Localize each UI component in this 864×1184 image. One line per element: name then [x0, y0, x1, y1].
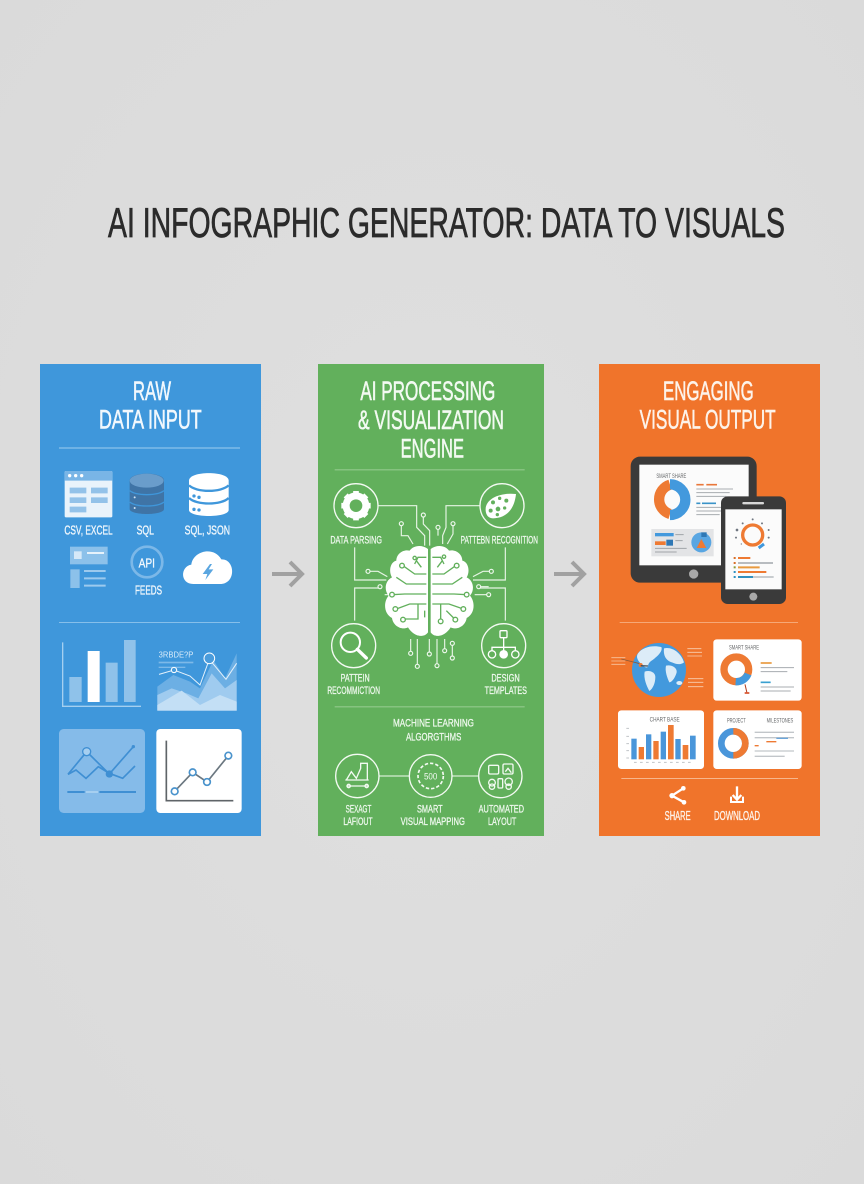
tablet: SMART SHARE — [656, 473, 687, 480]
icon: smart layout — [336, 754, 379, 798]
panel: engaging visual output — [599, 364, 820, 836]
area chart: 3RBDE?P — [159, 649, 194, 659]
heading: raw data input: RAW — [133, 376, 172, 406]
machine learning heading: MACHINE LEARNING — [393, 718, 474, 730]
engine labels — [327, 534, 538, 697]
engine labels: TEMPLATES — [485, 685, 527, 697]
arrow: processing to output — [554, 562, 584, 586]
device mockups — [631, 457, 786, 604]
pipeline labels: SMART — [417, 804, 443, 816]
icon: cloud — [183, 551, 232, 584]
bar chart — [63, 640, 141, 706]
tablet — [631, 457, 757, 583]
pipeline labels — [343, 804, 524, 828]
bar chart card: CHART BASE — [650, 717, 680, 724]
icon: api ring — [132, 547, 162, 577]
icon: api ring: API — [139, 556, 155, 570]
area chart — [157, 649, 237, 711]
icon: design template tree — [482, 624, 526, 668]
share and download labels: SHARE — [665, 808, 691, 823]
machine learning section — [335, 706, 525, 828]
icon labels: SQL, JSON — [185, 522, 230, 537]
pipeline labels: LAFIOUT — [343, 816, 373, 828]
icon labels: CSV, EXCEL — [64, 522, 113, 537]
icon: circuit brain — [385, 546, 474, 636]
heading: engaging visual output: VISUAL OUTPUT — [640, 404, 776, 434]
heading: raw data input — [59, 376, 240, 449]
icon: visual mapping — [409, 755, 452, 797]
icon labels: FEEDS — [135, 583, 162, 598]
pipeline labels: LAYOUT — [488, 816, 517, 828]
pipeline labels: VISUAL MAPPING — [401, 816, 465, 828]
icon: visual mapping: 500 — [424, 771, 437, 781]
tablet donut chart — [659, 484, 685, 515]
donut card: SMART SHARE — [729, 644, 759, 651]
engine labels: RECOMMICTION — [327, 685, 380, 697]
pipeline labels: SEXAGT — [346, 804, 371, 816]
globe with callouts — [611, 643, 703, 697]
output cards — [611, 639, 802, 823]
connector lines — [355, 506, 505, 666]
heading: raw data input: DATA INPUT — [99, 404, 202, 434]
pipeline labels: AUTOMATED — [479, 804, 524, 816]
icon: spreadsheet — [65, 471, 112, 517]
heading: ai processing engine: & VISUALIZATION — [358, 405, 504, 435]
project milestones card: PROJECT — [727, 718, 746, 725]
phone — [721, 496, 786, 604]
icon: json database — [189, 473, 229, 516]
icon: magnifier — [332, 624, 376, 668]
heading: ai processing engine — [335, 376, 525, 470]
heading: ai processing engine: ENGINE — [401, 433, 464, 463]
project milestones card — [713, 710, 802, 769]
engine diagram — [327, 484, 538, 697]
icon: share — [669, 786, 686, 805]
project milestones card: MILESTONES — [767, 718, 794, 725]
icon: pattern leaf — [480, 484, 524, 528]
heading: engaging visual output: ENGAGING — [663, 376, 754, 406]
icon: download — [731, 786, 743, 802]
arrow: input to processing — [272, 562, 302, 586]
share and download labels: DOWNLOAD — [714, 808, 760, 823]
machine learning heading: ALGORGTHMS — [406, 732, 462, 744]
light line chart card — [59, 729, 145, 813]
data source icons — [64, 471, 232, 598]
engine labels: PATTEBN RECOGNITION — [461, 534, 538, 546]
engine labels: DESIGN — [491, 672, 520, 684]
icon: document layout — [70, 547, 108, 588]
engine labels: PATTEIN — [341, 672, 370, 684]
icon: gear — [334, 484, 378, 528]
icon labels — [64, 522, 230, 598]
icon: sql database — [130, 474, 164, 514]
icon labels: SQL — [137, 522, 154, 537]
panel: ai processing engine — [318, 364, 544, 836]
engine labels: DATA PARSING — [330, 534, 382, 546]
bar chart card — [618, 710, 704, 769]
machine learning heading — [393, 718, 474, 744]
heading: ai processing engine: AI PROCESSING — [360, 376, 495, 406]
icon: automated layout — [479, 754, 522, 798]
donut card — [713, 639, 802, 701]
white line chart card — [156, 729, 242, 813]
share and download labels — [665, 808, 760, 823]
panel: raw data input — [40, 364, 261, 836]
charts — [59, 622, 242, 813]
heading: engaging visual output — [620, 376, 798, 623]
